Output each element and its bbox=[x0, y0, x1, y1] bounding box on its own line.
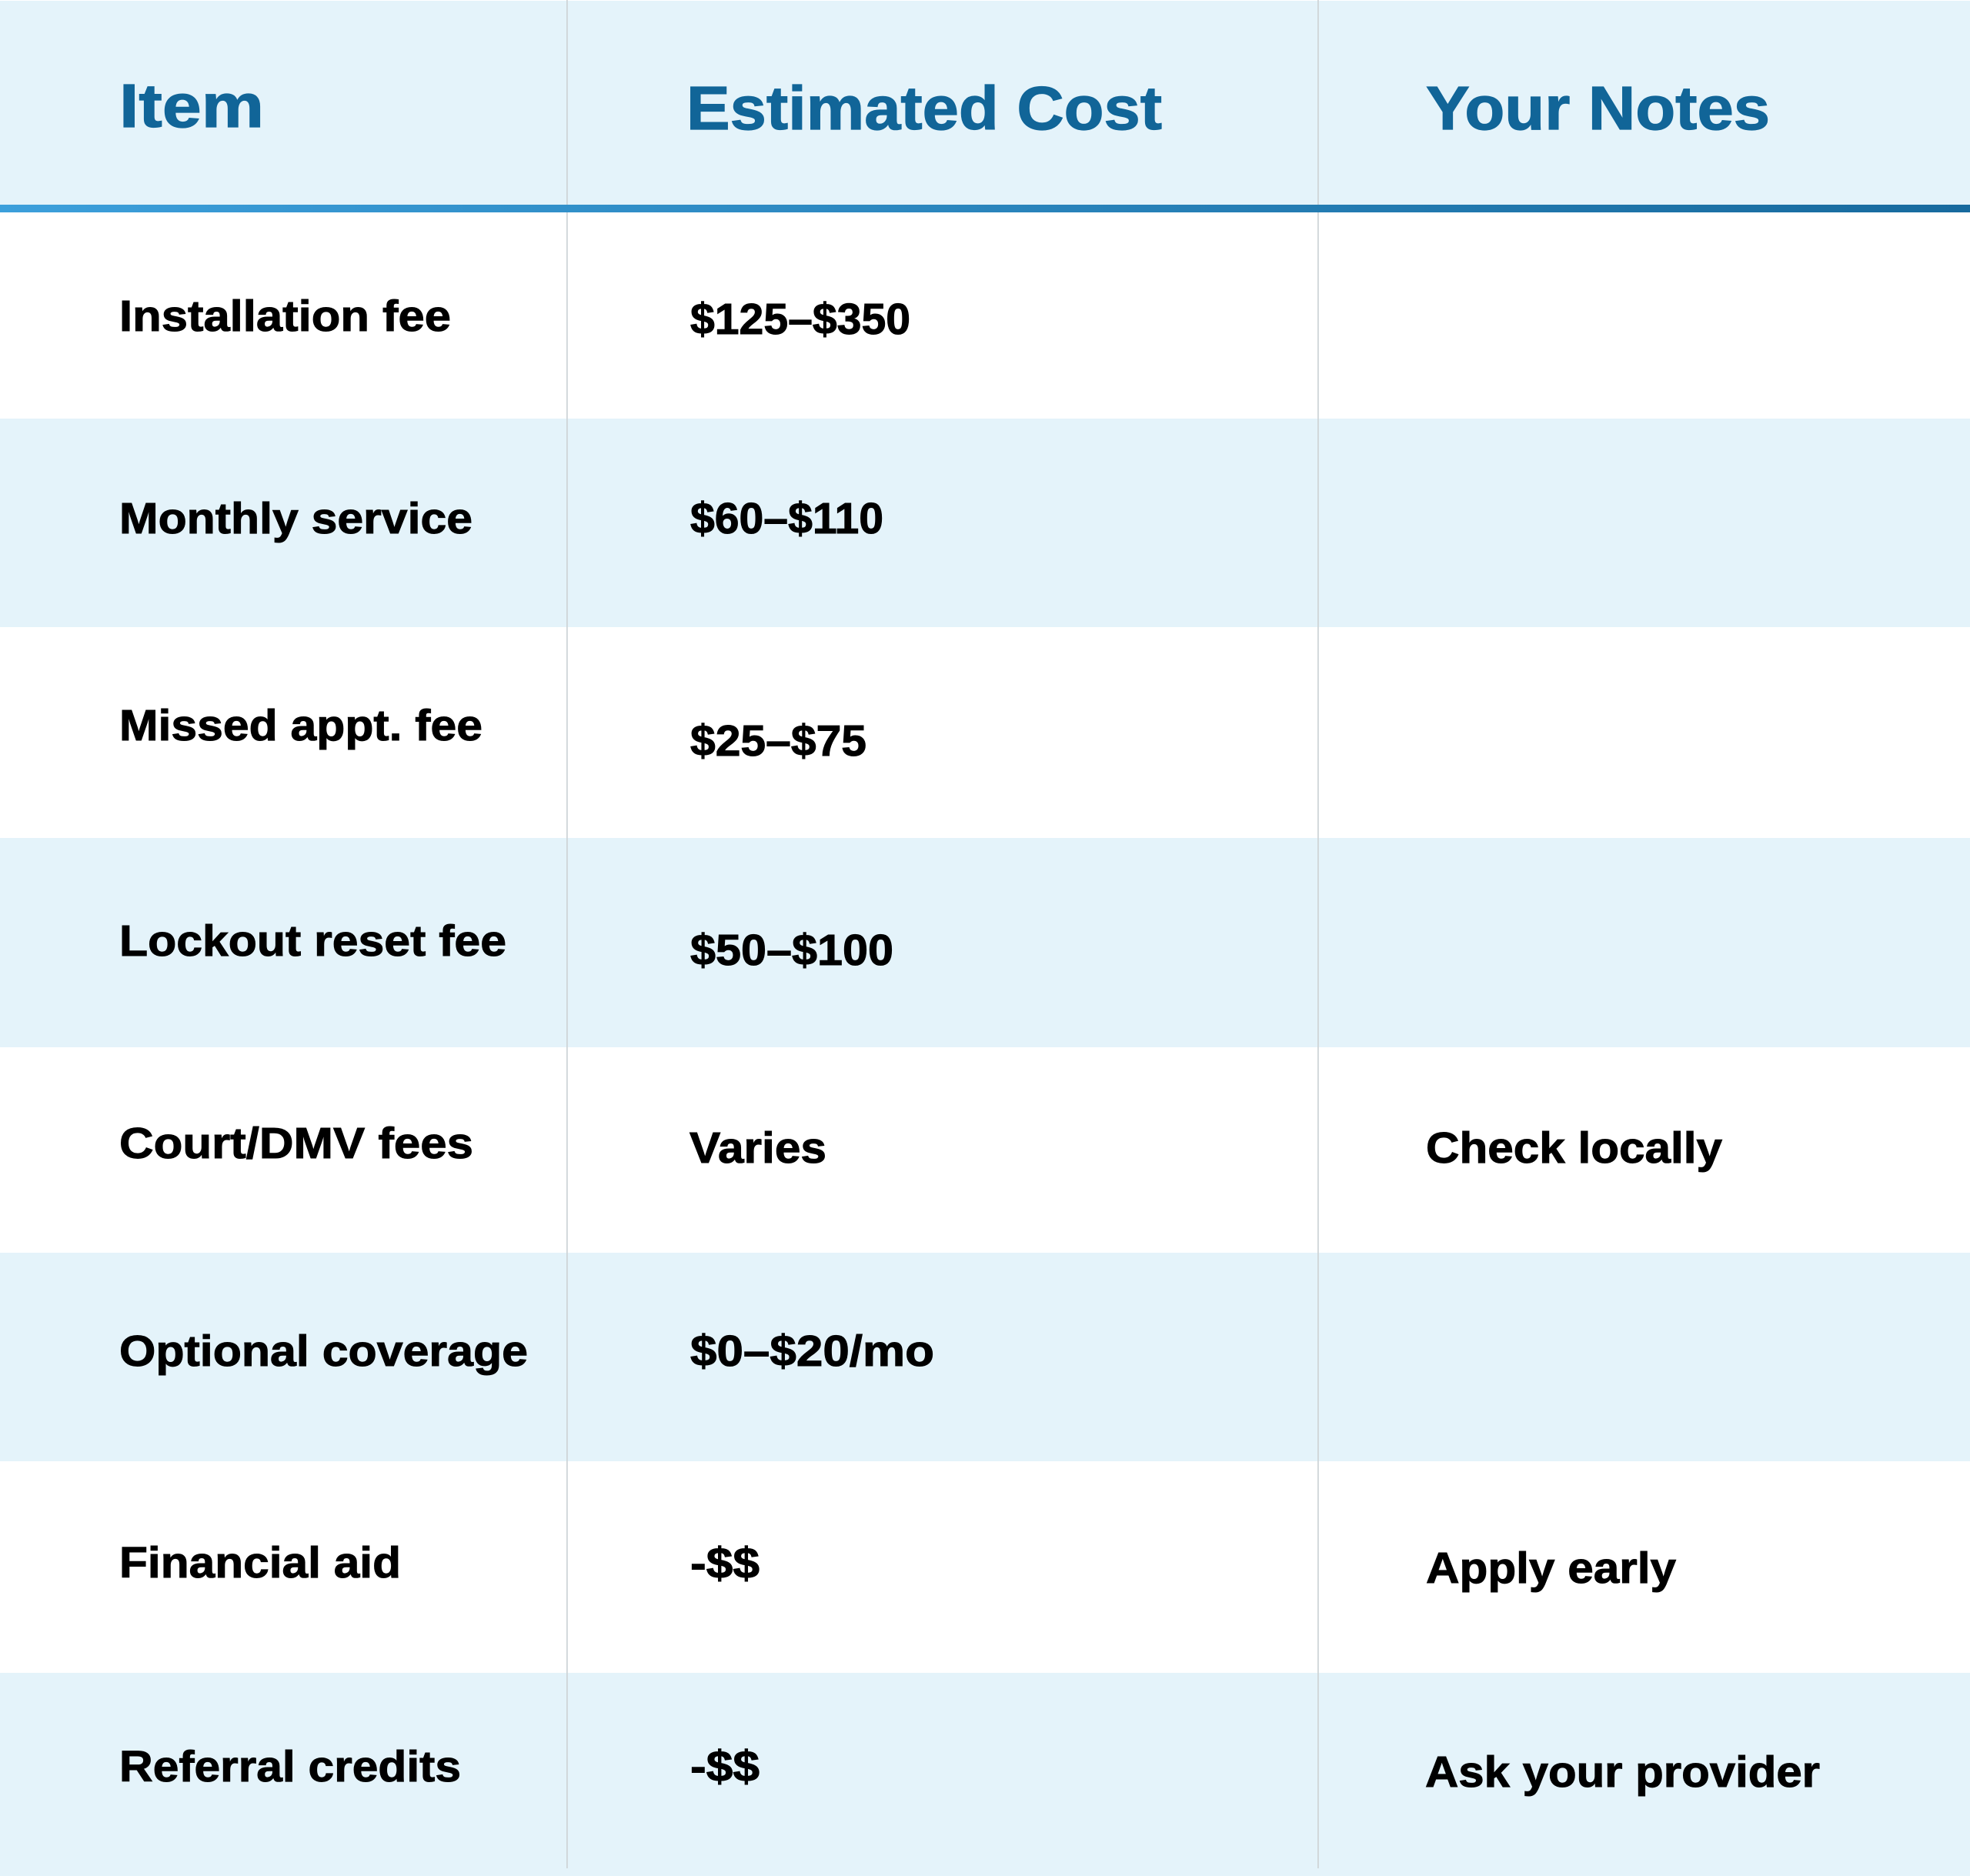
row: monthly service bbox=[119, 494, 883, 543]
row band: lockout reset fee bbox=[0, 838, 1970, 1047]
row band: referral credits bbox=[0, 1673, 1970, 1876]
row: lockout reset fee: $50–$100 bbox=[690, 926, 893, 975]
row: court and DMV fees: Varies bbox=[690, 1123, 826, 1173]
row: optional coverage: Optional coverage bbox=[119, 1327, 528, 1376]
row: lockout reset fee bbox=[119, 916, 893, 975]
row: monthly service: Monthly service bbox=[119, 494, 472, 543]
row: referral credits: Ask your provider bbox=[1425, 1747, 1820, 1797]
row band: monthly service bbox=[0, 419, 1970, 627]
row: referral credits: Referral credits bbox=[119, 1742, 461, 1791]
row: financial aid bbox=[119, 1538, 1676, 1593]
header rule bbox=[0, 205, 1970, 212]
heading: Your Notes: Your Notes bbox=[1426, 74, 1770, 142]
row: installation fee: $125–$350 bbox=[690, 295, 910, 344]
row: missed appointment fee: $25–$75 bbox=[690, 716, 866, 766]
row: court and DMV fees: Court/DMV fees bbox=[119, 1119, 473, 1168]
row: monthly service: $60–$110 bbox=[690, 494, 883, 543]
column divider: item and cost bbox=[566, 0, 568, 1868]
row: missed appointment fee: Missed appt. fee bbox=[119, 701, 482, 750]
heading: Item: Item bbox=[119, 72, 264, 140]
row: installation fee bbox=[119, 292, 910, 344]
row: lockout reset fee: Lockout reset fee bbox=[119, 916, 506, 966]
row: installation fee: Installation fee bbox=[119, 292, 451, 341]
row: missed appointment fee bbox=[119, 701, 866, 766]
row: optional coverage bbox=[119, 1327, 934, 1376]
column divider: cost and notes bbox=[1317, 0, 1319, 1868]
row: referral credits bbox=[119, 1742, 1820, 1797]
heading: Estimated Cost: Estimated Cost bbox=[686, 74, 1162, 142]
row: referral credits: -$$ bbox=[690, 1742, 760, 1791]
row: financial aid: Apply early bbox=[1426, 1544, 1676, 1593]
row: financial aid: -$$ bbox=[690, 1539, 760, 1588]
row: court and DMV fees bbox=[119, 1119, 1722, 1173]
row: optional coverage: $0–$20/mo bbox=[690, 1327, 934, 1376]
row: financial aid: Financial aid bbox=[119, 1538, 401, 1587]
row band: optional coverage bbox=[0, 1253, 1970, 1461]
row: court and DMV fees: Check locally bbox=[1426, 1123, 1722, 1173]
header row background bbox=[0, 1, 1970, 205]
